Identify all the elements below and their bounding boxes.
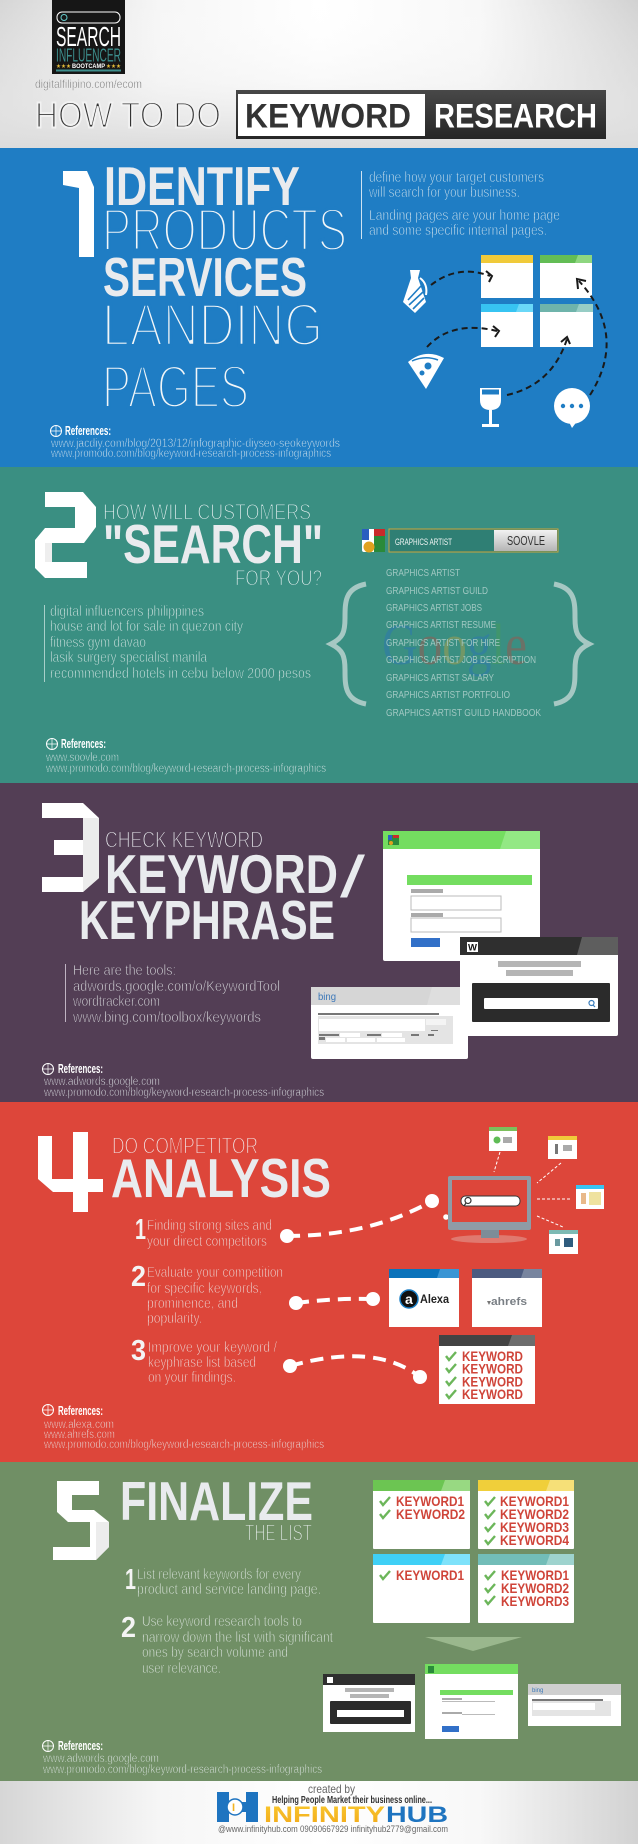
window: keyword checklist: KEYWORD xyxy=(462,1348,523,1364)
watermark: google: Google xyxy=(382,612,527,677)
window: keyword checklist: KEYWORD xyxy=(462,1360,523,1376)
references: References: xyxy=(65,423,111,438)
references: www.adwords.google.com xyxy=(43,1076,160,1088)
panel: step 3 check keyword xyxy=(0,783,638,1102)
icon: pizza xyxy=(408,354,444,389)
references xyxy=(42,1738,322,1776)
step 3 text xyxy=(131,1335,278,1386)
step 2 text: Use keyword research tools to xyxy=(142,1613,302,1630)
window: bing: bing xyxy=(318,992,336,1003)
keyword window: green: KEYWORD1 xyxy=(396,1493,464,1509)
text block: tools: Here are the tools: xyxy=(73,962,176,979)
text block: example searches: lasik surgery specialist manila xyxy=(50,649,208,666)
heading: finalize the list: FINALIZE xyxy=(120,1470,313,1532)
step 3 text: 3 xyxy=(131,1335,146,1367)
search bar: soovle xyxy=(389,529,558,552)
suggestion list: GRAPHICS ARTIST FOR HIRE xyxy=(386,637,500,649)
small window: bing xyxy=(528,1684,621,1726)
heading: how will customers search for you: "SEARCH" xyxy=(103,513,323,575)
heading: identify products services landing pages: LANDING xyxy=(102,292,323,358)
panel: step 2 search xyxy=(0,467,638,783)
logo url: digitalfilipino.com/ecom xyxy=(35,77,142,91)
braces xyxy=(331,584,589,704)
text block: example searches: recommended hotels in cebu below 2000 pesos xyxy=(50,665,311,682)
references xyxy=(50,423,340,460)
icon: tie xyxy=(403,270,426,313)
references: www.promodo.com/blog/keyword-research-process-infographics xyxy=(42,1764,322,1776)
small window: wordtracker xyxy=(323,1674,415,1732)
text block: example searches: digital influencers philippines xyxy=(50,603,204,620)
suggestion list: GRAPHICS ARTIST GUILD xyxy=(386,585,488,597)
title box: keyword research: RESEARCH xyxy=(434,98,597,136)
heading: do competitor analysis xyxy=(111,1132,331,1209)
text block: description xyxy=(361,169,560,239)
heading: finalize the list xyxy=(120,1470,313,1546)
references xyxy=(42,1403,324,1451)
keyword window: green: KEYWORD2 xyxy=(396,1506,465,1522)
logo: search influencer bootcamp: ★★★ xyxy=(56,63,71,70)
step 1 text: List relevant keywords for every xyxy=(137,1566,301,1583)
heading: identify products services landing pages: PAGES xyxy=(102,354,249,420)
text block: tools: adwords.google.com/o/KeywordTool xyxy=(73,978,280,995)
window: bing xyxy=(311,987,468,1059)
title box: keyword research: KEYWORD xyxy=(245,98,411,136)
number 3 xyxy=(42,803,99,892)
search bar: soovle: GRAPHICS ARTIST xyxy=(395,537,452,548)
keyword window: yellow: KEYWORD2 xyxy=(500,1506,569,1522)
text block: example searches xyxy=(44,603,311,682)
created by: created by xyxy=(308,1782,355,1796)
suggestion list: GRAPHICS ARTIST RESUME xyxy=(386,619,496,631)
small window: bing: bing xyxy=(532,1688,543,1694)
wordmark: infinity hub: HUB xyxy=(386,1802,448,1827)
step 1 text xyxy=(135,1214,272,1250)
heading: identify products services landing pages: SERVICES xyxy=(103,246,307,308)
heading: identify products services landing pages: PRODUCTS xyxy=(102,196,347,264)
references: www.alexa.com xyxy=(43,1419,114,1431)
connector lines xyxy=(287,1201,432,1377)
keyword window: cyan: KEYWORD1 xyxy=(396,1567,464,1583)
suggestion list: GRAPHICS ARTIST JOB DESCRIPTION xyxy=(386,654,536,666)
panel: step 4 competitor analysis xyxy=(0,1102,638,1462)
monitor xyxy=(448,1176,531,1243)
keyword window: teal xyxy=(478,1554,574,1623)
step 2 text: 2 xyxy=(131,1261,146,1293)
heading: identify products services landing pages: IDENTIFY xyxy=(104,155,300,217)
window: alexa: a xyxy=(405,1291,413,1307)
suggestion list: GRAPHICS ARTIST GUILD HANDBOOK xyxy=(386,707,541,719)
suggestion list: GRAPHICS ARTIST xyxy=(386,567,460,579)
heading: check keyword keyphrase: CHECK KEYWORD xyxy=(105,826,263,852)
arrow: funnel triangle xyxy=(425,1637,522,1651)
step 2 text: Evaluate your competition xyxy=(147,1264,283,1281)
window: ahrefs xyxy=(472,1269,542,1327)
window: keyword checklist xyxy=(439,1335,535,1404)
heading: how will customers search for you: FOR YOU? xyxy=(235,566,322,590)
references: www.promodo.com/blog/keyword-research-process-infographics xyxy=(43,1439,324,1451)
heading: how will customers search for you xyxy=(103,500,323,590)
number 1 xyxy=(63,171,94,257)
logo: search influencer bootcamp xyxy=(52,0,125,74)
window: ahrefs: ahrefs xyxy=(491,1296,527,1308)
step 1 text: Finding strong sites and xyxy=(147,1217,272,1234)
heading: identify products services landing pages xyxy=(102,155,347,420)
heading: check keyword keyphrase: KEYPHRASE xyxy=(79,889,335,951)
connector dots xyxy=(280,1194,449,1384)
step 2 text: ones by search volume and xyxy=(142,1644,288,1661)
heading: check keyword keyphrase xyxy=(79,826,366,951)
logo: search influencer bootcamp: ★★★ xyxy=(106,63,121,70)
step 1 text: your direct competitors xyxy=(147,1233,267,1250)
text block: tools: www.bing.com/toolbox/keywords xyxy=(72,1009,261,1026)
references: www.ahrefs.com xyxy=(43,1429,115,1441)
keyword window: yellow: KEYWORD1 xyxy=(500,1493,569,1509)
mini windows with dashed links xyxy=(489,1127,604,1254)
heading: do competitor analysis: ANALYSIS xyxy=(111,1147,331,1209)
step 1 text xyxy=(125,1564,321,1598)
references xyxy=(45,736,326,775)
logo: search influencer bootcamp: SEARCH xyxy=(56,21,121,52)
contact line: @www.infinityhub.com 09090667929 infinityhub2779@gmail.com xyxy=(218,1824,448,1834)
window: keyword checklist: KEYWORD xyxy=(462,1374,523,1390)
heading: do competitor analysis: DO COMPETITOR xyxy=(112,1132,258,1158)
step 2 text: narrow down the list with significant xyxy=(142,1629,334,1646)
text block: example searches: fitness gym davao xyxy=(50,634,146,651)
text block: description: and some specific internal pages. xyxy=(369,222,547,239)
references: References: xyxy=(58,1061,103,1076)
references: References: xyxy=(58,1403,103,1418)
references: References: xyxy=(58,1738,103,1753)
number 2 xyxy=(35,492,96,578)
window: keyword checklist: KEYWORD xyxy=(462,1386,523,1402)
icon: chat bubble xyxy=(554,388,590,428)
suggestion list: GRAPHICS ARTIST PORTFOLIO xyxy=(386,689,510,701)
heading: how will customers search for you: HOW WILL CUSTOMERS xyxy=(103,500,311,524)
step 2 text: 2 xyxy=(121,1612,136,1644)
keyword window: green xyxy=(373,1480,470,1549)
step 3 text: keyphrase list based xyxy=(148,1354,256,1371)
references: References: xyxy=(61,736,106,751)
references: www.adwords.google.com xyxy=(42,1753,159,1765)
step 3 text: Improve your keyword / xyxy=(148,1339,278,1356)
window: alexa xyxy=(389,1269,459,1327)
text block: description: will search for your business. xyxy=(368,184,520,201)
panel: step 5 finalize xyxy=(0,1462,638,1781)
keyword window: yellow xyxy=(478,1480,574,1549)
references: www.promodo.com/blog/keyword-research-process-infographics xyxy=(45,763,326,775)
references xyxy=(42,1061,324,1099)
logo: search influencer bootcamp: BOOTCAMP xyxy=(72,64,105,70)
landing page windows xyxy=(481,255,593,347)
icon: soovle logo xyxy=(362,529,385,552)
icon: wine glass xyxy=(480,388,501,427)
logo: search influencer bootcamp: INFLUENCER xyxy=(56,46,121,66)
logo: infinity hub icon: I xyxy=(232,1802,235,1814)
step 2 text: user relevance. xyxy=(142,1660,221,1677)
text block: tools: wordtracker.com xyxy=(72,993,160,1010)
title box: keyword research xyxy=(236,90,606,139)
text block: description: Landing pages are your home page xyxy=(369,207,560,224)
text block: description: define how your target customers xyxy=(369,169,544,186)
step 1 text: product and service landing page. xyxy=(137,1581,321,1598)
text block: tools xyxy=(65,962,280,1026)
suggestion list xyxy=(386,567,541,719)
suggestion list: GRAPHICS ARTIST JOBS xyxy=(386,602,482,614)
window: alexa: Alexa xyxy=(420,1294,450,1306)
keyword window: yellow: KEYWORD4 xyxy=(500,1532,569,1548)
step 1 text: 1 xyxy=(125,1564,136,1596)
window: wordtracker xyxy=(460,937,618,1036)
references: www.soovle.com xyxy=(45,752,119,764)
heading: check keyword keyphrase: KEYWORD xyxy=(105,843,338,905)
suggestion list: GRAPHICS ARTIST SALARY xyxy=(386,672,494,684)
step 2 text: for specific keywords, xyxy=(147,1280,262,1297)
number 5 xyxy=(53,1481,109,1560)
step 2 text: prominence, and xyxy=(147,1295,238,1312)
window: google adwords xyxy=(383,831,540,961)
references: www.jacdiy.com/blog/2013/12/infographic-diyseo-seokeywords xyxy=(50,438,340,450)
step 3 text: on your findings. xyxy=(148,1369,236,1386)
wordmark: infinity hub: INFINITY xyxy=(264,1802,385,1827)
panel: footer xyxy=(0,1781,638,1844)
keyword window: yellow: KEYWORD3 xyxy=(500,1519,569,1535)
heading: check keyword keyphrase: / xyxy=(340,845,366,910)
references: www.promodo.com/blog/keyword-research-process-infographics xyxy=(50,448,331,460)
step 2 text xyxy=(121,1612,334,1677)
references: www.promodo.com/blog/keyword-research-process-infographics xyxy=(43,1087,324,1099)
step 2 text: popularity. xyxy=(147,1310,202,1327)
search bar: soovle: SOOVLE xyxy=(507,533,545,548)
keyword window: teal: KEYWORD1 xyxy=(501,1567,569,1583)
window: wordtracker: W xyxy=(468,942,478,952)
step 2 text xyxy=(131,1261,283,1327)
tagline: Helping People Market their business online... xyxy=(272,1795,432,1806)
keyword window: teal: KEYWORD3 xyxy=(501,1593,569,1609)
keyword window: teal: KEYWORD2 xyxy=(501,1580,569,1596)
keyword window: cyan xyxy=(373,1554,470,1623)
text block: example searches: house and lot for sale in quezon city xyxy=(50,618,243,635)
logo: infinity hub icon xyxy=(217,1792,258,1822)
small window: google adwords xyxy=(425,1664,518,1739)
title: how to do: HOW TO DO xyxy=(35,94,221,136)
panel: step 1 identify xyxy=(0,148,638,467)
number 4 xyxy=(38,1132,103,1212)
panel: header xyxy=(0,0,638,148)
step 1 text: 1 xyxy=(135,1214,146,1246)
wordmark: infinity hub xyxy=(264,1802,448,1827)
heading: finalize the list: THE LIST xyxy=(245,1520,312,1546)
dashed arrows xyxy=(427,271,607,395)
